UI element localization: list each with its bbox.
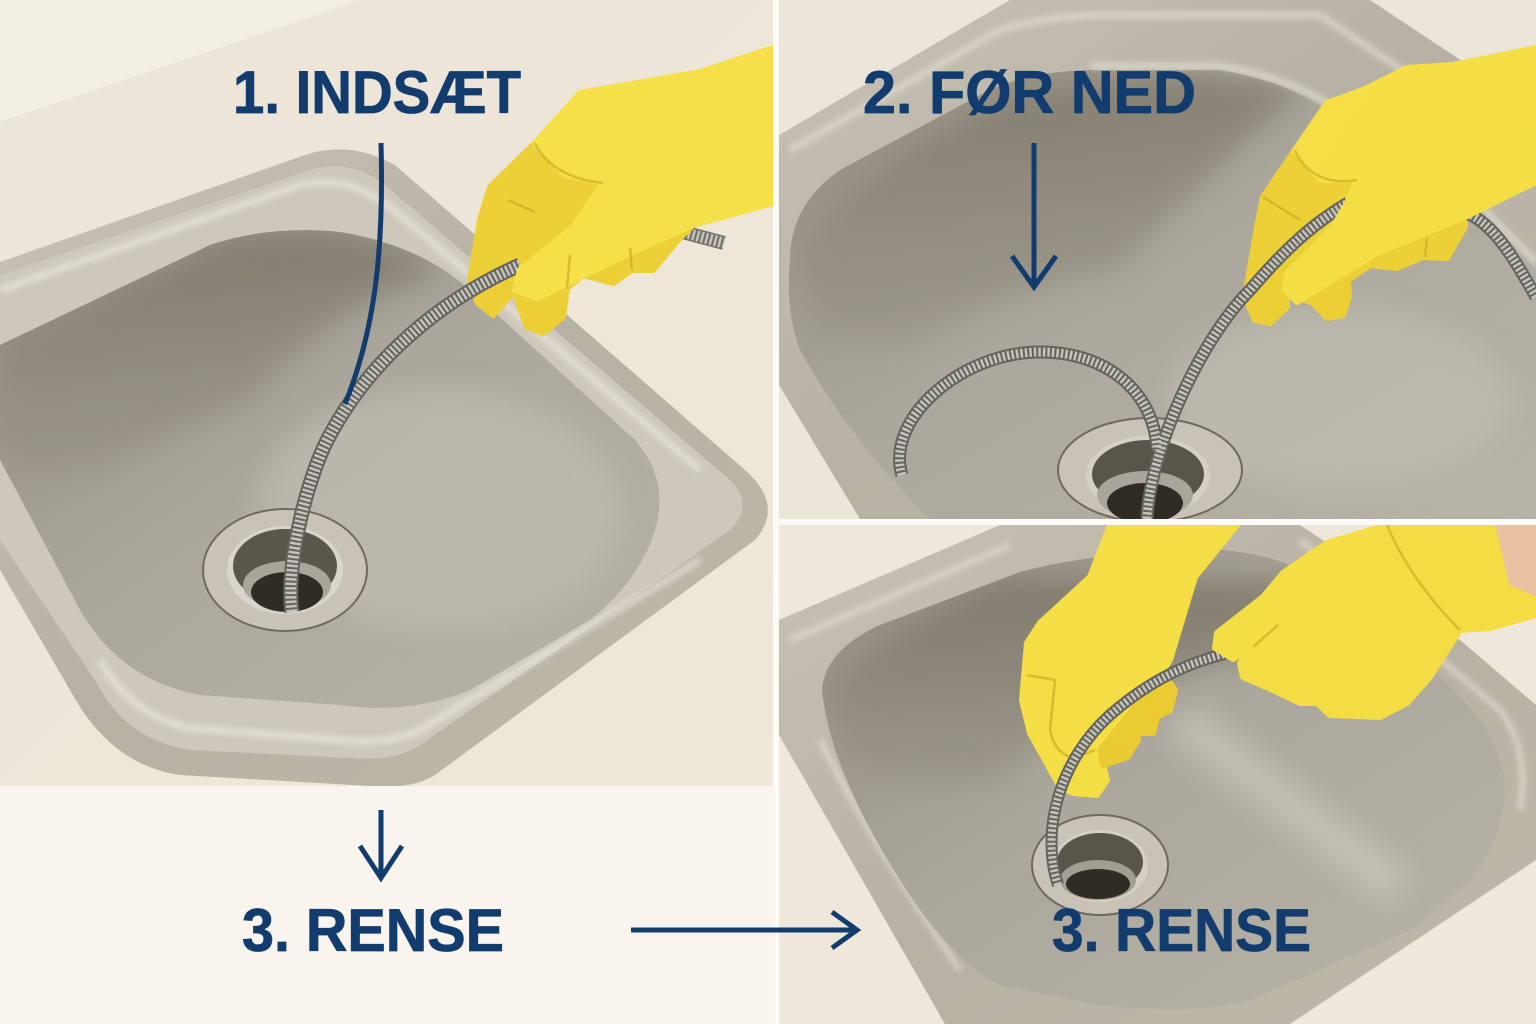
sink rim (0, 149, 768, 787)
heading: step 1: 1. INDSÆT (233, 59, 521, 126)
arrow: step 2 down (1012, 143, 1056, 287)
heading: step 3 right: 3. RENSE (1052, 897, 1311, 964)
left yellow glove (1022, 525, 1237, 795)
panel: step 1 insert (0, 0, 773, 787)
basin edge highlight (1090, 66, 1536, 262)
bottom left band (0, 786, 775, 1024)
drain snake cable (1051, 654, 1225, 885)
heading: step 2: 2. FØR NED (863, 59, 1196, 126)
panel: step 2 feed down (779, 0, 1536, 523)
palm and thumb (515, 48, 773, 298)
bare wrist (1495, 525, 1536, 597)
heading: step 3 left: 3. RENSE (242, 897, 504, 964)
drain (203, 509, 367, 631)
cable end (675, 230, 724, 243)
left glove thumb crease (1027, 675, 1095, 758)
yellow glove (291, 48, 773, 612)
right yellow glove (1215, 525, 1536, 717)
drain (1032, 815, 1168, 915)
basin shading (800, 77, 1510, 490)
drain (1058, 418, 1242, 523)
finger creases (1263, 150, 1427, 257)
sink rim (779, 525, 1536, 1024)
drain snake cable (900, 203, 1536, 519)
fingers (470, 143, 693, 333)
palm and thumb (1285, 48, 1536, 302)
basin shading (830, 580, 1400, 890)
sink basin (0, 230, 660, 708)
sink basin (789, 70, 1536, 519)
rim light strip (789, 10, 1404, 152)
finger creases (508, 143, 632, 288)
basin shading (0, 230, 620, 630)
sink basin (822, 550, 1505, 1009)
drain snake cable (291, 265, 520, 612)
sink rim (779, 0, 1536, 519)
countertop (779, 0, 1536, 519)
right glove cuff crease (1253, 525, 1460, 647)
countertop (0, 0, 773, 786)
countertop (779, 525, 1536, 1024)
rim light strip (790, 540, 1522, 970)
fingers (1245, 130, 1465, 323)
arrow: right to step 3 panel (631, 912, 857, 948)
yellow glove (900, 48, 1536, 519)
rim highlight (0, 166, 742, 759)
gripped fingers (1100, 683, 1175, 765)
panel: step 3 clean (779, 525, 1536, 1024)
arrow: down to step 3 (360, 810, 402, 878)
rim light strips (0, 182, 700, 741)
arrow: curved line from step 1 heading to cable (345, 143, 382, 404)
